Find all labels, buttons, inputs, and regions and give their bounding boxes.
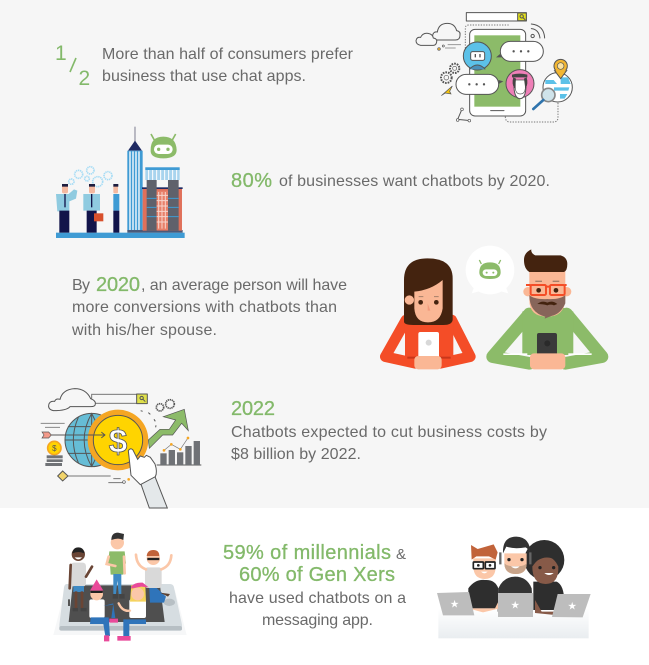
stat 5 text: 59% of millennials [223,542,391,564]
illustration: three people at laptops [437,537,591,638]
woman [385,258,470,369]
man [493,249,602,369]
stat 1 fraction: one half [55,42,90,90]
person: woman in pink hat [89,579,118,641]
stat 5 text: messaging app. [262,612,373,629]
illustration: three people at laptops: ★ [511,600,521,612]
icon: coin, globe, growth chart and hand: $ [109,424,128,461]
stat 3 text: By [72,277,90,294]
stat 5 text: 60% of Gen Xers [239,564,395,586]
stat 1 text [102,46,354,85]
stat 3 text: 2020 [96,274,140,296]
stat 4 text: 2022 [231,398,275,420]
person: standing man [107,533,126,599]
icon: coin, globe, growth chart and hand: $ [52,444,57,453]
stat 3 text: , an average person will have [141,277,347,294]
stat 1 fraction: one half: 2 [78,67,90,90]
stat 4 text: $8 billion by 2022. [231,446,361,463]
stat 4 text: Chatbots expected to cut business costs by [231,424,547,441]
stat 1 text: More than half of consumers prefer [102,46,354,63]
person: woman with blonde hair [117,583,149,641]
person: arms raised [136,550,171,603]
stat 2 text: of businesses want chatbots by 2020. [279,173,550,190]
stat 2 text [231,170,550,192]
stat 5 text: & [396,546,406,563]
person: left man [70,547,92,611]
stat 3 text: with his/her spouse. [71,322,217,339]
illustration: young people on a giant phone [53,533,187,641]
illustration: woman and man on phones [385,246,602,369]
stat 1 text: business that use chat apps. [102,68,306,85]
stat 3 text [71,274,347,339]
stat 3 text: more conversions with chatbots than [72,299,337,316]
stat 5 text: have used chatbots on a [229,590,406,607]
illustration: three people at laptops: ★ [450,599,460,611]
icon: coin, globe, growth chart and hand [41,389,201,508]
speech bubble with robot [466,246,514,294]
stat 4 text [231,398,547,463]
icon: phone with chat bubbles [416,13,572,122]
stat 2 text: 80% [231,170,272,192]
icon: business people and skyscrapers with robot [56,127,185,238]
illustration: three people at laptops: ★ [568,601,578,613]
stat 1 fraction: one half: 1 [55,42,67,65]
stat 5 text [223,542,406,629]
